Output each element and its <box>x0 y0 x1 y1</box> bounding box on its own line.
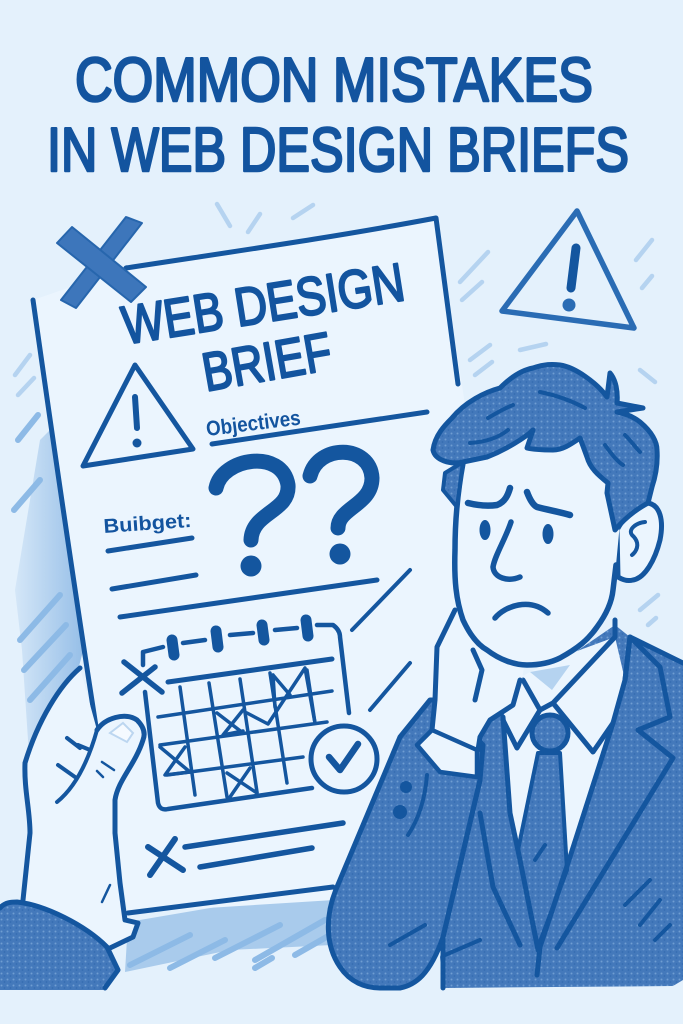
bottom checklist lines <box>148 823 343 875</box>
icon: warning triangle on brief <box>83 365 193 466</box>
collar <box>503 620 630 752</box>
figure: worried man <box>328 364 683 988</box>
decorative sketch marks <box>15 204 658 690</box>
heading: web design brief <box>118 252 409 403</box>
icon: large X mark <box>57 217 146 308</box>
hair <box>433 364 657 530</box>
icon: check circle <box>311 726 377 792</box>
sleeve details <box>390 775 427 945</box>
budget label and lines: Buibget: <box>103 510 192 538</box>
objectives label <box>205 407 427 444</box>
nose and mouth <box>493 522 548 618</box>
eyebrows <box>468 488 570 515</box>
hand on neck <box>432 610 525 750</box>
question mark dots <box>240 544 350 576</box>
icon: warning triangle right <box>502 211 634 328</box>
heading: web design brief: BRIEF <box>198 321 336 403</box>
suit jacket body <box>440 625 683 988</box>
eyes <box>480 520 554 544</box>
cuff <box>417 730 477 777</box>
shadow behind brief <box>14 415 333 972</box>
budget label and lines <box>103 510 377 617</box>
necktie <box>518 715 568 947</box>
shirt <box>503 637 625 950</box>
chin shadow <box>530 665 570 690</box>
sleeve left <box>0 902 118 990</box>
title: COMMON MISTAKES <box>75 46 593 115</box>
objectives label: Objectives <box>205 407 302 441</box>
hand holding brief <box>23 668 144 948</box>
lapels <box>443 637 683 988</box>
title <box>47 46 629 185</box>
heading: web design brief: WEB DESIGN <box>118 252 409 356</box>
question marks <box>216 452 372 540</box>
ear <box>617 503 662 581</box>
face <box>455 420 625 665</box>
calendar <box>122 620 377 809</box>
panel: brief document <box>33 218 540 913</box>
sketch motion lines <box>352 570 410 710</box>
arm sleeve <box>328 700 483 988</box>
